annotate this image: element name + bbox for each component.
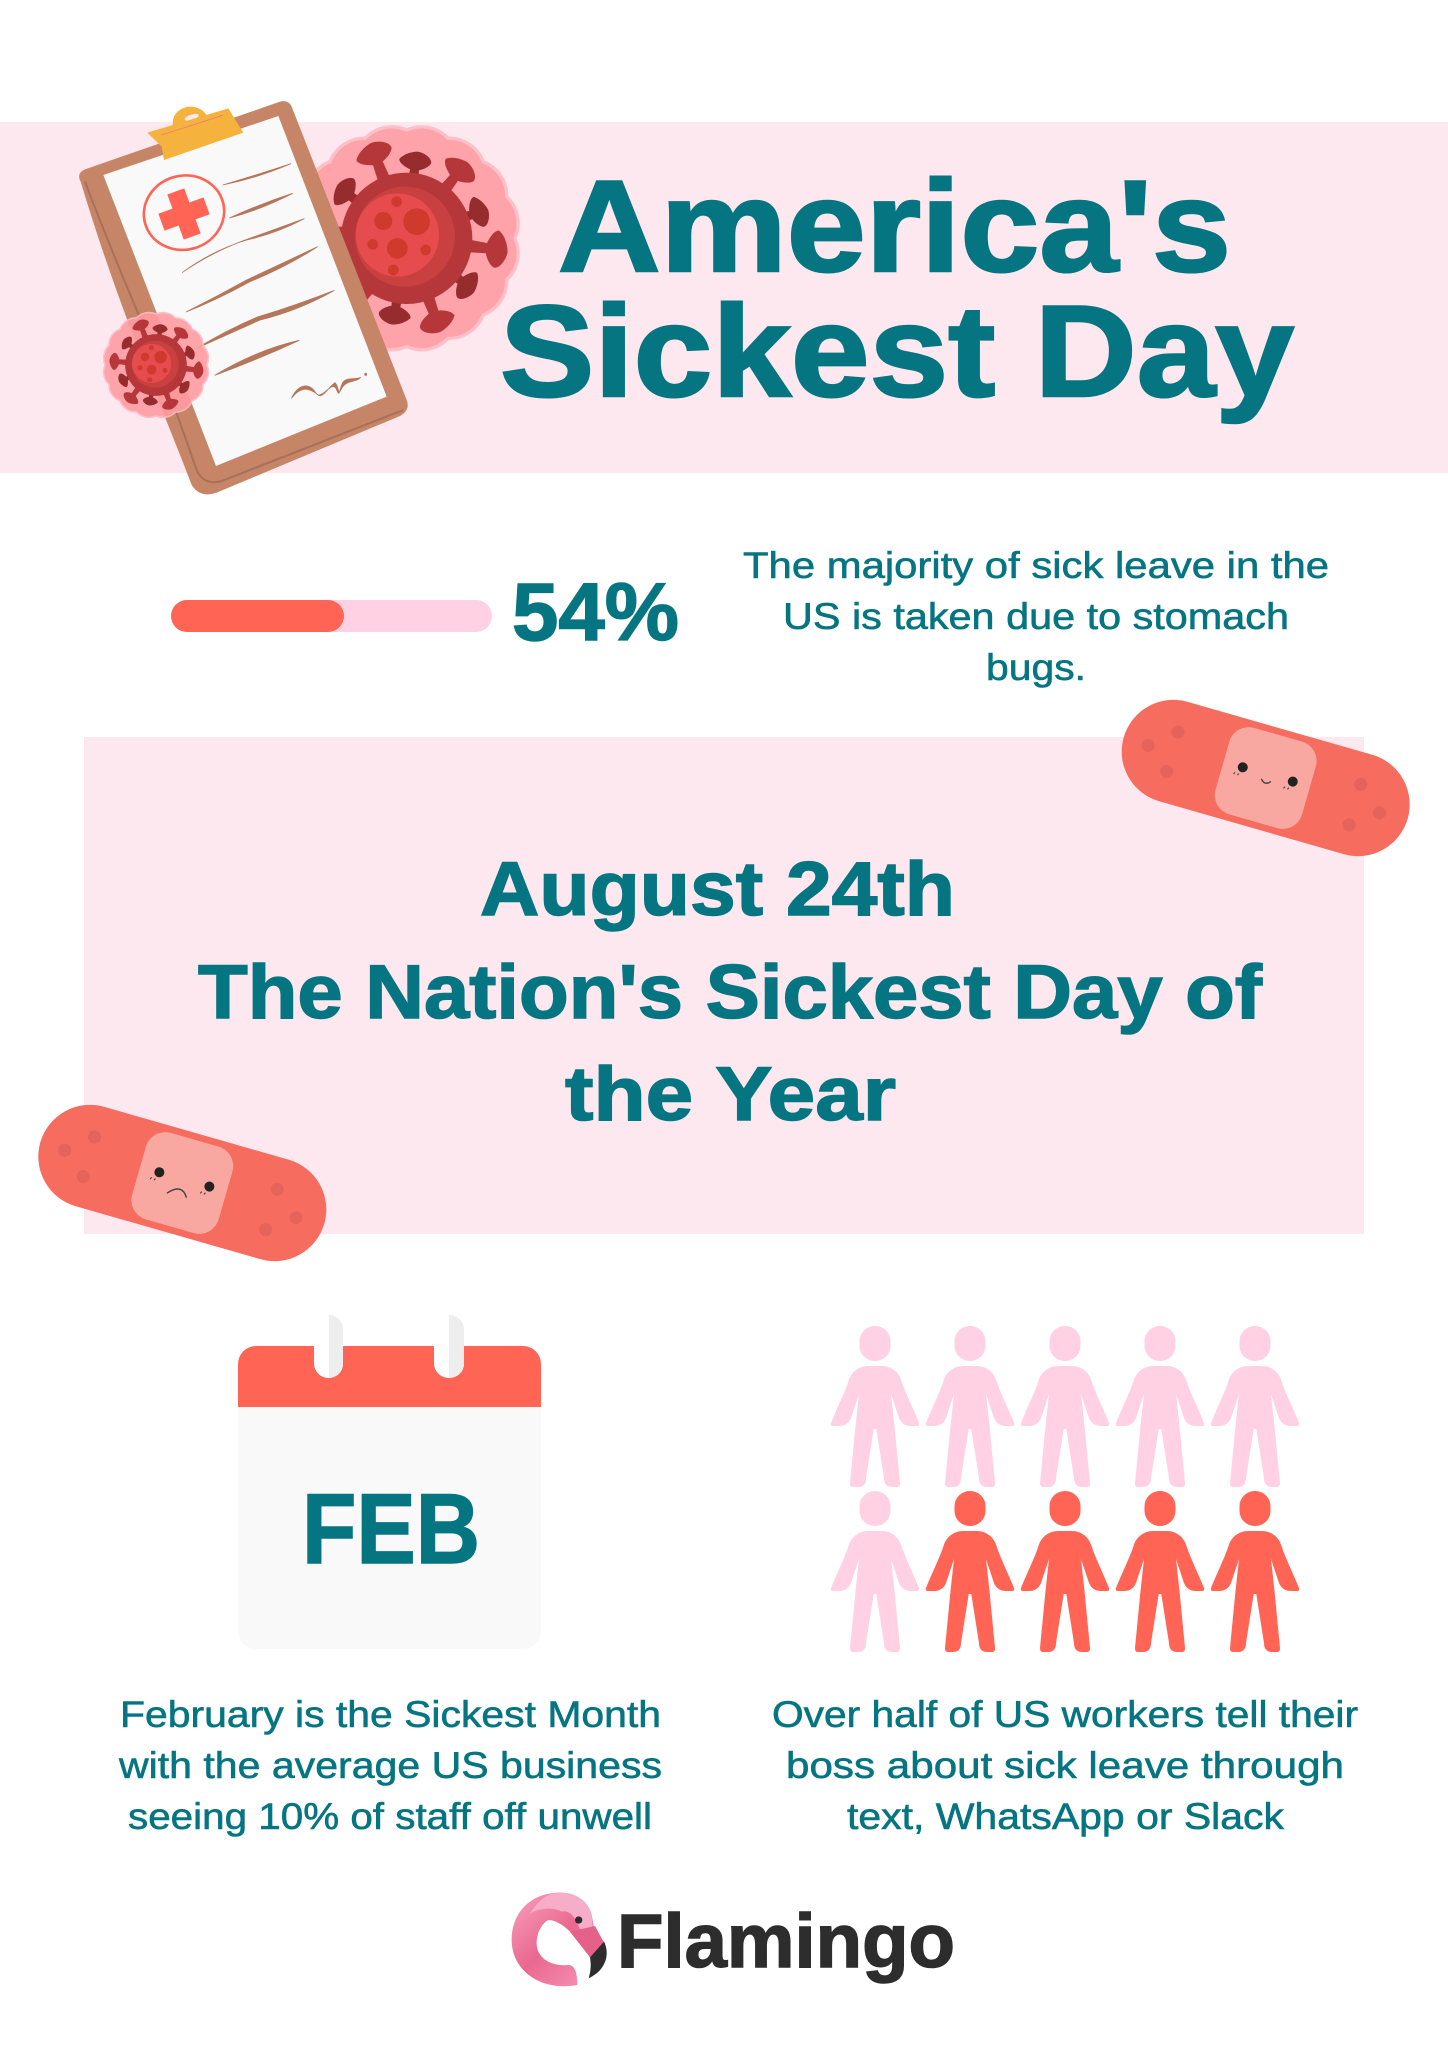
caption: february: seeing 10% of staff off unwell bbox=[128, 1796, 652, 1837]
icon: sad bandage bbox=[26, 1093, 339, 1273]
caption: february bbox=[118, 1694, 662, 1837]
icon: large virus bbox=[295, 127, 518, 350]
stat description: bugs. bbox=[986, 647, 1086, 688]
header band bbox=[0, 122, 1448, 473]
stat description: The majority of sick leave in the bbox=[743, 545, 1329, 586]
icon: calendar bbox=[238, 1315, 541, 1649]
logo: flamingo icon bbox=[512, 1893, 607, 1986]
caption: workers: Over half of US workers tell their bbox=[772, 1694, 1358, 1735]
panel heading: August 24th bbox=[480, 847, 955, 932]
progress bar 54% bbox=[171, 600, 492, 632]
caption: february: with the average US business bbox=[118, 1745, 662, 1786]
icon: small virus bbox=[104, 313, 208, 417]
icon: clipboard bbox=[79, 101, 408, 494]
caption: february: February is the Sickest Month bbox=[120, 1694, 661, 1735]
stat description: US is taken due to stomach bbox=[783, 596, 1289, 637]
calendar month: FEB bbox=[302, 1473, 480, 1584]
caption: workers: boss about sick leave through bbox=[786, 1745, 1344, 1786]
logo: flamingo wordmark: Flamingo bbox=[617, 1899, 955, 1984]
panel heading: the Year bbox=[565, 1052, 896, 1137]
people pictogram bbox=[831, 1326, 1299, 1652]
illustration: clipboard with viruses bbox=[79, 101, 518, 494]
icon: happy bandage bbox=[1109, 688, 1422, 868]
caption: workers bbox=[772, 1694, 1358, 1837]
panel heading: The Nation's Sickest Day of bbox=[198, 950, 1263, 1035]
caption: workers: text, WhatsApp or Slack bbox=[847, 1796, 1285, 1837]
panel: august 24th bbox=[84, 737, 1364, 1234]
title bbox=[500, 153, 1294, 424]
title: Sickest Day bbox=[500, 278, 1294, 424]
panel heading bbox=[198, 847, 1263, 1137]
stat value: 54% bbox=[512, 567, 679, 658]
title: America's bbox=[558, 153, 1231, 299]
stat description bbox=[743, 545, 1329, 688]
